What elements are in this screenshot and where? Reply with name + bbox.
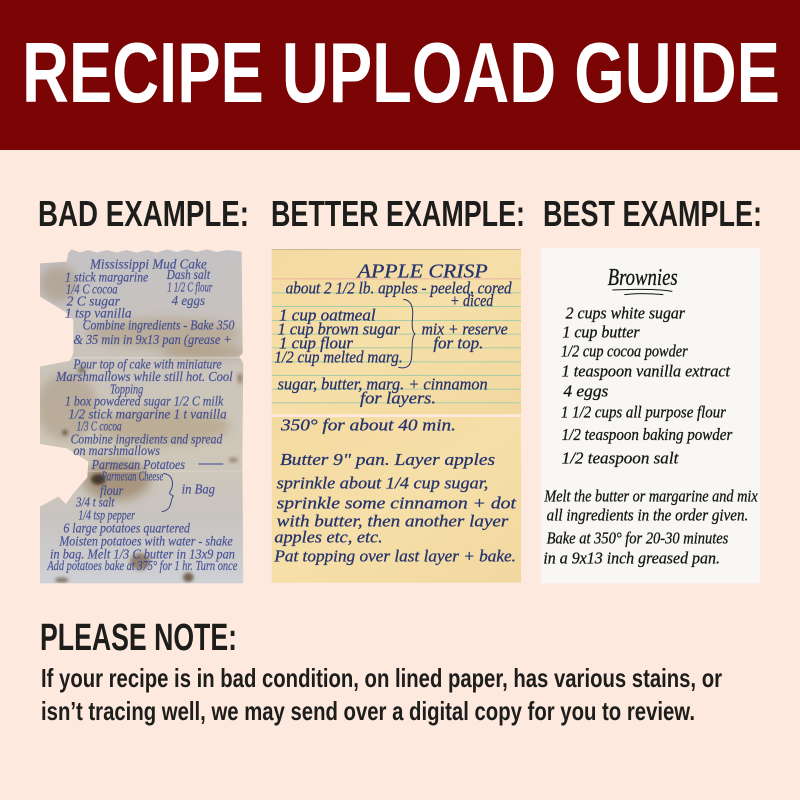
handwriting: mud cake and potatoes: Marshmallows while still hot. Cool [55, 370, 233, 385]
handwriting: apple crisp: 350° for about 40 min. [280, 416, 456, 435]
handwriting: apple crisp: with butter, then another layer [277, 512, 509, 531]
heading: please note: PLEASE NOTE: [40, 617, 237, 659]
handwriting: apple crisp: Pat topping over last layer + bake. [273, 547, 516, 566]
handwriting: mud cake and potatoes: 1/2 stick margarine 1 t vanilla [68, 407, 227, 422]
handwriting: brownies: Melt the butter or margarine and mix [544, 487, 758, 506]
handwriting: mud cake and potatoes: 1/4 tsp pepper [78, 508, 135, 523]
handwriting: apple crisp: APPLE CRISP [355, 260, 488, 282]
handwriting: brownies: all ingredients in the order given. [547, 506, 748, 525]
handwriting: mud cake and potatoes: 1 box powdered sugar 1/2 C milk [65, 395, 224, 410]
heading: bad example: BAD EXAMPLE: [38, 193, 249, 234]
handwriting: apple crisp: sugar, butter, marg. + cinnamon [278, 374, 488, 393]
handwriting: brownies: 4 eggs [563, 382, 609, 401]
handwriting: mud cake and potatoes: Parmesan Cheese [101, 470, 163, 485]
handwriting: mud cake and potatoes [47, 257, 237, 574]
handwriting: mud cake and potatoes: 1 1/2 C flour [167, 281, 213, 296]
handwriting: brownies [543, 265, 758, 567]
panel: best example, clean recipe [541, 248, 760, 583]
handwriting: brownies: 1/2 teaspoon salt [562, 448, 679, 467]
handwriting: apple crisp: mix + reserve [422, 319, 508, 338]
handwriting: mud cake and potatoes: 1/4 C cocoa [66, 282, 118, 297]
handwriting: brownies: in a 9x13 inch greased pan. [543, 548, 720, 567]
handwriting: mud cake and potatoes: on marshmallows [73, 444, 160, 459]
handwriting: mud cake and potatoes: in bag. Melt 1/3 C butter in 13x9 pan [50, 547, 235, 562]
heading: better example: BETTER EXAMPLE: [271, 193, 525, 234]
handwriting: mud cake and potatoes: Add potatoes bake at 375° for 1 hr. Turn once [47, 559, 237, 574]
handwriting: mud cake and potatoes: flour [100, 484, 124, 499]
handwriting: mud cake and potatoes: Dash salt [166, 268, 211, 283]
handwriting: mud cake and potatoes: 2 C sugar [67, 295, 121, 310]
handwriting: brownies: 1 cup butter [562, 322, 640, 341]
handwriting: apple crisp: for top. [433, 333, 483, 352]
handwriting: apple crisp: about 2 1/2 lb. apples - peeled, cored [286, 278, 512, 297]
handwriting: apple crisp: 1 cup oatmeal [279, 306, 376, 325]
handwriting: mud cake and potatoes: in Bag [182, 482, 215, 497]
handwriting: mud cake and potatoes: 1/3 C cocoa [77, 420, 122, 435]
handwriting: brownies: 1 1/2 cups all purpose flour [561, 402, 726, 421]
handwriting: brownies: Brownies [608, 265, 678, 291]
panel: better example, index cards [272, 249, 521, 583]
handwriting: apple crisp: apples etc, etc. [274, 528, 383, 547]
handwriting: mud cake and potatoes: 6 large potatoes quartered [63, 522, 191, 537]
handwriting: apple crisp: sprinkle about 1/4 cup sugar, [277, 473, 488, 492]
handwriting: mud cake and potatoes: Pour top of cake with miniature [72, 357, 222, 372]
handwriting: apple crisp: 1 cup brown sugar [278, 319, 400, 338]
panel: bad example, torn stained recipe [30, 247, 250, 587]
note text [41, 663, 722, 726]
handwriting: mud cake and potatoes: 1 tsp vanilla [65, 306, 132, 321]
handwriting: mud cake and potatoes: Moisten potatoes with water - shake [58, 535, 233, 550]
handwriting: apple crisp [273, 260, 517, 566]
handwriting: mud cake and potatoes: Parmesan Potatoes [91, 458, 185, 473]
card: bottom [272, 417, 521, 583]
handwriting: mud cake and potatoes: 1 stick margarine [65, 271, 148, 286]
handwriting: mud cake and potatoes: 3/4 t salt [75, 496, 115, 511]
handwriting: apple crisp: 1 cup flour [279, 333, 353, 352]
handwriting: mud cake and potatoes: Combine ingredients - Bake 350 [83, 318, 234, 333]
handwriting: brownies: 1/2 cup cocoa powder [561, 342, 688, 361]
card: top [272, 249, 521, 414]
handwriting: mud cake and potatoes: Topping [110, 382, 143, 397]
handwriting: mud cake and potatoes: Mississippi Mud Cake [89, 257, 207, 272]
handwriting: brownies: 2 cups white sugar [566, 303, 685, 322]
title banner [0, 0, 800, 150]
handwriting: mud cake and potatoes: & 35 min in 9x13 pan (grease + [73, 333, 232, 348]
handwriting: mud cake and potatoes: Combine ingredients and spread [71, 432, 223, 447]
handwriting: brownies: 1 teaspoon vanilla extract [562, 362, 731, 381]
handwriting: brownies: 1/2 teaspoon baking powder [562, 425, 733, 444]
handwriting: apple crisp: for layers. [360, 388, 436, 407]
handwriting: mud cake and potatoes: 4 eggs [172, 294, 206, 309]
handwriting: apple crisp: + diced [450, 291, 494, 310]
handwriting: apple crisp: Butter 9" pan. Layer apples [280, 450, 495, 469]
handwriting: apple crisp: sprinkle some cinnamon + dot [277, 493, 517, 512]
handwriting: apple crisp: 1/2 cup melted marg. [274, 347, 403, 366]
handwriting: brownies: Bake at 350° for 20-30 minutes [547, 528, 729, 547]
